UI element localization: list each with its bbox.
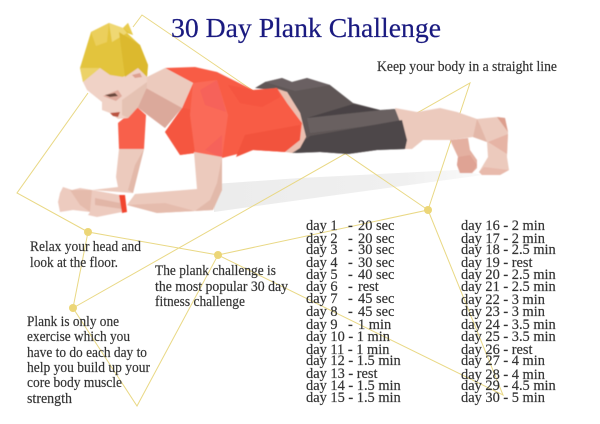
schedule: days 1 to 15: 20 sec: [358, 231, 394, 247]
schedule: days 1 to 15: 45 sec: [358, 291, 394, 307]
floor shadow: [214, 170, 483, 212]
schedule: days 16 to 30: day 21 - 2.5 min: [461, 279, 556, 295]
schedule: days 1 to 15: 30 sec: [358, 255, 394, 271]
schedule: days 1 to 15: day 9: [306, 317, 338, 333]
schedule: days 1 to 15: day 14 - 1.5 min: [306, 378, 401, 394]
ear: [132, 73, 142, 78]
tip: relax head: Relax your head and: [30, 239, 141, 255]
schedule: days 1 to 15: day 15 - 1.5 min: [306, 390, 401, 406]
connecting line network: [17, 15, 503, 406]
schedule: days 1 to 15: -: [348, 317, 353, 333]
tip: core muscle: core body muscle: [27, 375, 122, 391]
eye: [103, 90, 122, 101]
tip: relax head: look at the floor.: [30, 255, 118, 271]
schedule: days 1 to 15: day 11 - 1 min: [306, 342, 389, 358]
schedule: days 16 to 30: day 20 - 2.5 min: [461, 267, 556, 283]
schedule: days 16 to 30: day 29 - 4.5 min: [461, 378, 556, 394]
lips: [110, 112, 120, 117]
schedule: days 16 to 30: day 30 - 5 min: [461, 390, 545, 406]
schedule: days 16 to 30: day 23 - 3 min: [461, 304, 545, 320]
schedule: days 1 to 15: day 5: [306, 267, 338, 283]
schedule: days 16 to 30: day 16 - 2 min: [461, 218, 545, 234]
schedule: days 16 to 30: day 17 - 2 min: [461, 231, 545, 247]
leg and near foot: [395, 108, 509, 175]
schedule: days 16 to 30: day 24 - 3.5 min: [461, 317, 556, 333]
schedule: days 16 to 30: day 27 - 4 min: [461, 353, 545, 369]
shirt hem trim: [275, 88, 306, 153]
schedule: days 16 to 30: day 19 - rest: [461, 255, 533, 271]
sleeve: [118, 107, 146, 149]
hands: [58, 187, 122, 217]
schedule: days 1 to 15: -: [348, 291, 353, 307]
shorts: [255, 78, 407, 154]
far foot: [450, 138, 477, 173]
schedule: days 1 to 15: -: [348, 255, 353, 271]
neck and shoulder: [137, 68, 193, 128]
title: 30 Day Plank Challenge: [171, 13, 441, 43]
near arm: [127, 152, 222, 213]
schedule: days 1 to 15: [306, 218, 401, 406]
schedule: days 1 to 15: 40 sec: [358, 267, 394, 283]
schedule: days 1 to 15: day 10 - 1 min: [306, 329, 390, 345]
schedule: days 1 to 15: day 8: [306, 304, 338, 320]
tip: core muscle: help you build up your: [27, 360, 150, 376]
tip: core muscle: strength: [27, 391, 72, 407]
schedule: days 16 to 30: day 25 - 3.5 min: [461, 329, 556, 345]
tip: most popular challenge: The plank challenge is: [155, 263, 276, 279]
tip: relax head: [30, 239, 141, 271]
schedule: days 1 to 15: 45 sec: [358, 304, 394, 320]
tip: core muscle: [27, 314, 150, 407]
dots: [69, 206, 432, 312]
schedule: days 16 to 30: [461, 218, 556, 406]
schedule: days 1 to 15: 1 min: [358, 317, 391, 333]
schedule: days 1 to 15: -: [348, 231, 353, 247]
tip: most popular challenge: the most popular 30 day: [155, 279, 289, 295]
tip: core muscle: Plank is only one: [27, 314, 119, 330]
shirt torso: [165, 67, 302, 158]
schedule: days 1 to 15: -: [348, 242, 353, 258]
schedule: days 16 to 30: day 28 - 4 min: [461, 367, 545, 383]
tip: most popular challenge: fitness challenge: [155, 294, 245, 310]
schedule: days 1 to 15: day 2: [306, 231, 338, 247]
schedule: days 1 to 15: day 6: [306, 279, 338, 295]
schedule: days 16 to 30: day 18 - 2.5 min: [461, 242, 556, 258]
schedule: days 16 to 30: day 26 - rest: [461, 342, 533, 358]
schedule: days 1 to 15: day 7: [306, 291, 338, 307]
schedule: days 1 to 15: day 13 - rest: [306, 366, 378, 382]
schedule: days 1 to 15: day 12 - 1.5 min: [306, 353, 401, 369]
hair: [80, 23, 148, 82]
schedule: days 1 to 15: day 4: [306, 255, 338, 271]
schedule: days 1 to 15: -: [348, 267, 353, 283]
figure: woman in plank position: [58, 23, 509, 217]
tip: core muscle: exercise which you: [27, 329, 130, 345]
schedule: days 1 to 15: day 1: [306, 218, 338, 234]
schedule: days 16 to 30: day 22 - 3 min: [461, 292, 545, 308]
schedule: days 1 to 15: rest: [358, 279, 379, 295]
far arm: [92, 149, 144, 193]
schedule: days 1 to 15: -: [348, 218, 353, 234]
schedule: days 1 to 15: -: [348, 279, 353, 295]
schedule: days 1 to 15: 30 sec: [358, 242, 394, 258]
tip: most popular challenge: [155, 263, 289, 310]
tip: straight line: Keep your body in a straight line: [377, 59, 557, 75]
face: [83, 68, 147, 119]
schedule: days 1 to 15: day 3: [306, 242, 338, 258]
tip: core muscle: have to do each day to: [27, 345, 147, 361]
wristband: [119, 195, 127, 213]
schedule: days 1 to 15: 20 sec: [358, 218, 394, 234]
schedule: days 1 to 15: -: [348, 304, 353, 320]
